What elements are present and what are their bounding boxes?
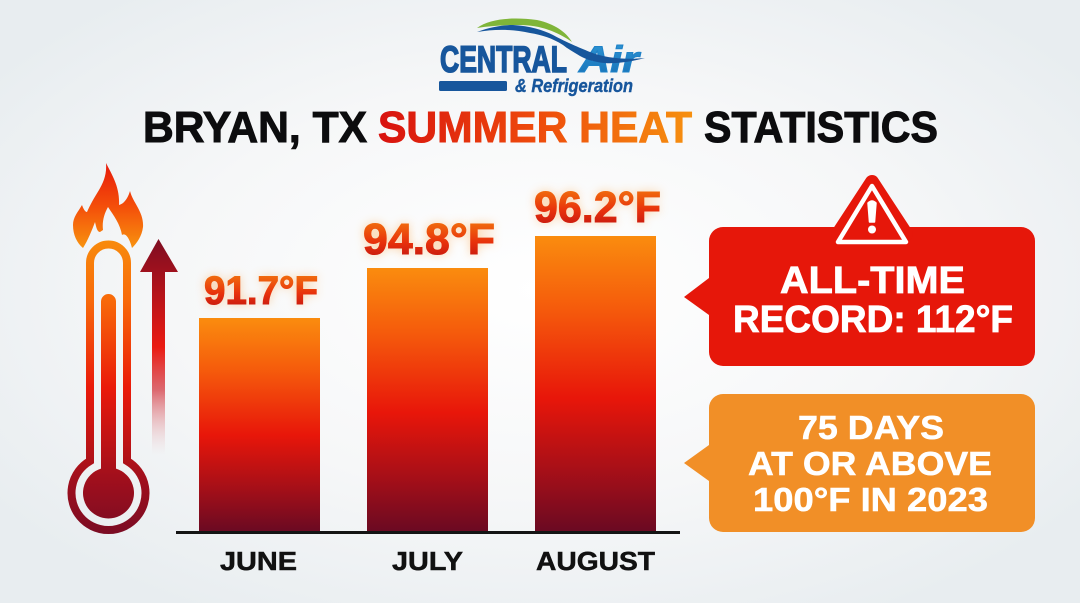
icon: flame [73, 163, 143, 248]
callout text: 100°F IN 2023 [753, 481, 988, 518]
month labels: AUGUST [536, 546, 655, 576]
bar: June [199, 269, 320, 531]
logo bar [439, 81, 507, 91]
thermometer outline [71, 244, 146, 530]
icon: thermometer with flame [71, 163, 146, 530]
title [143, 103, 938, 152]
thermometer mercury [83, 294, 134, 518]
callout text: 75 DAYS [798, 409, 944, 446]
title: BRYAN, TX [143, 103, 367, 152]
bar: August [534, 183, 661, 531]
chart axis [176, 531, 680, 534]
logo tagline: & Refrigeration [515, 76, 633, 96]
logo blue swoosh [477, 25, 645, 63]
month labels: JUNE [220, 546, 297, 576]
bar: June: 91.7°F [204, 269, 318, 313]
bar: July: 94.8°F [363, 215, 495, 264]
callout text: AT OR ABOVE [748, 445, 992, 482]
month labels [220, 546, 655, 576]
icon: warning triangle [838, 182, 906, 242]
callout text: ALL-TIME [780, 260, 965, 302]
title: STATISTICS [704, 103, 938, 152]
month labels: JULY [392, 546, 463, 576]
bar: August: 96.2°F [534, 183, 661, 232]
callout text [733, 260, 1013, 341]
bar: August: 96.2°F [534, 183, 661, 232]
callout text: RECORD: 112°F [733, 299, 1013, 341]
logo wordmark Air: Air [578, 39, 642, 80]
callout text [748, 409, 992, 518]
bar: July [363, 215, 495, 531]
arrow: rising temperature [140, 239, 178, 455]
bar: July: 94.8°F [363, 215, 495, 264]
callout: all-time record [684, 182, 1035, 366]
logo green swoosh [477, 19, 572, 42]
title: SUMMER HEAT [378, 103, 692, 152]
callout: days above 100°F [684, 394, 1035, 532]
bar chart: average high temperatures [176, 183, 680, 576]
logo: Central Air & Refrigeration [439, 19, 645, 96]
value glow June: 91.7°F [204, 269, 318, 313]
logo wordmark CENTRAL: CENTRAL [440, 39, 567, 80]
